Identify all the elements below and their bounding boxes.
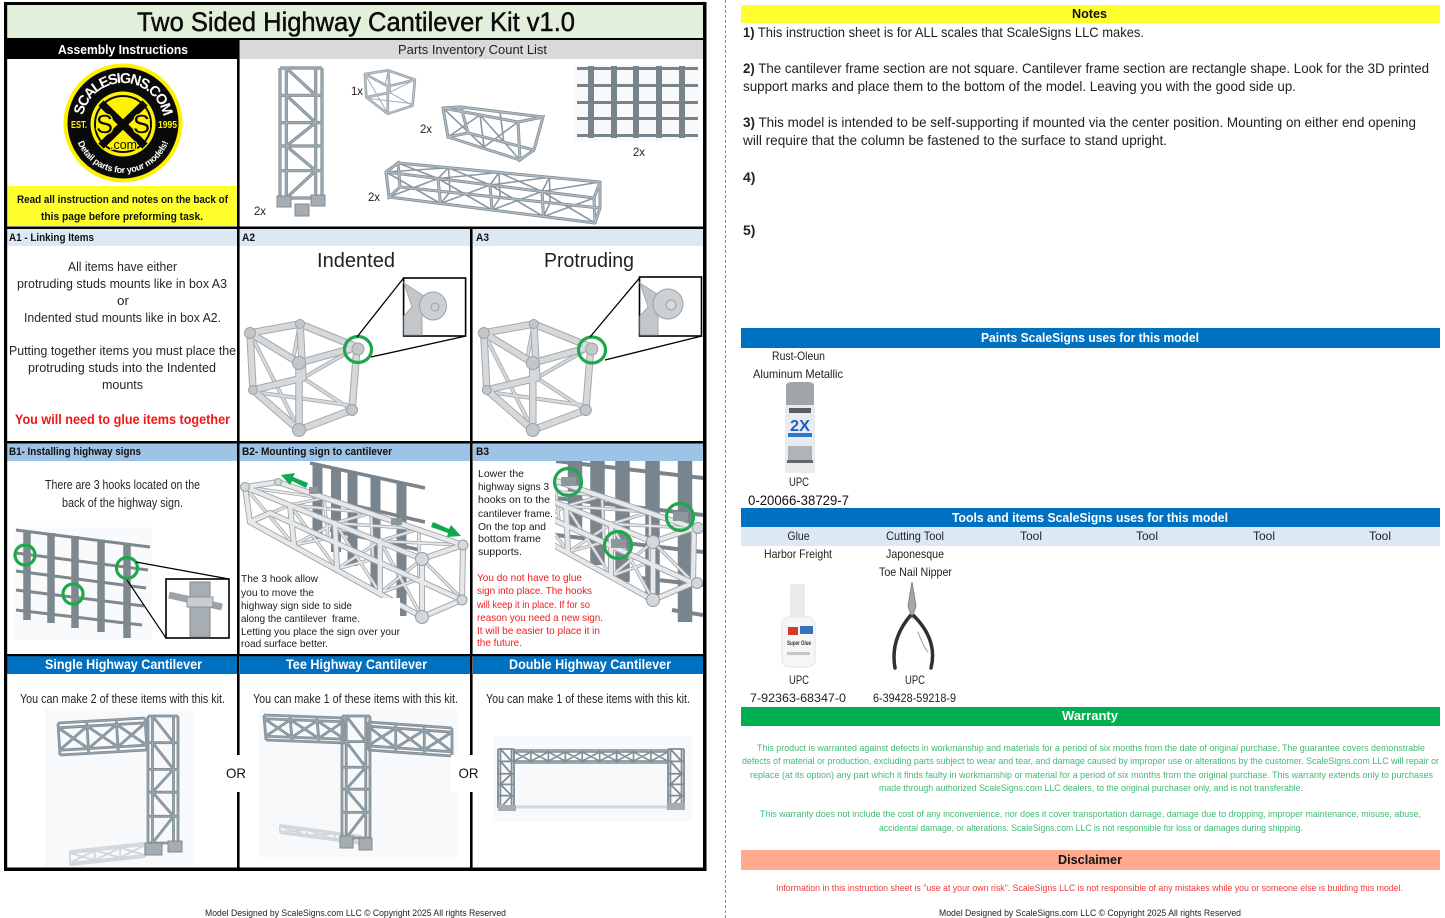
paint name: Aluminum Metallic bbox=[753, 367, 843, 381]
right page: notes and materials bbox=[741, 5, 1440, 918]
warranty header: Warranty bbox=[1062, 708, 1119, 723]
B3 red note: will keep it in place. If for so bbox=[476, 599, 590, 611]
A1 header: A1 - Linking Items bbox=[9, 232, 94, 244]
B3 text: Lower the bbox=[478, 468, 524, 480]
header: assembly instructions: Assembly Instructions bbox=[58, 42, 188, 57]
panel: single highway cantilever bbox=[7, 656, 237, 867]
panel B1: installing highway signs bbox=[7, 443, 237, 640]
B2 text: The 3 hook allow bbox=[241, 573, 318, 585]
panel A1: linking items bbox=[7, 229, 237, 427]
B3 red note: It will be easier to place it in bbox=[477, 625, 600, 637]
B2 truss with sign bbox=[240, 463, 468, 624]
A1 text: protruding studs mounts like in box A3 bbox=[17, 277, 227, 291]
tools column headers bbox=[741, 527, 1440, 546]
cutting tool brand bbox=[879, 547, 952, 579]
notice: read all instructions: this page before preforming task. bbox=[41, 211, 203, 223]
left page: assembly sheet bbox=[7, 5, 703, 866]
A1 text bbox=[9, 260, 236, 392]
A1 text: Putting together items you must place the bbox=[9, 344, 236, 358]
tools header: Tools and items ScaleSigns uses for this model bbox=[952, 510, 1228, 525]
OR label between single and tee bbox=[226, 755, 250, 792]
A1 text: All items have either bbox=[68, 260, 177, 274]
center fold line bbox=[724, 0, 726, 918]
paint name bbox=[753, 349, 843, 381]
B2 move arrows bbox=[281, 473, 461, 537]
A1 text: or bbox=[117, 294, 129, 308]
B3 text bbox=[478, 468, 553, 558]
tee cantilever illustration bbox=[259, 707, 457, 857]
icon: nail nipper bbox=[894, 582, 933, 668]
warranty text bbox=[742, 743, 1439, 834]
B3 red note bbox=[476, 572, 603, 649]
B2 text: Letting you place the sign over your bbox=[241, 626, 400, 638]
B3 text: On the top and bbox=[478, 521, 546, 533]
parts: long truss 2x: 2x bbox=[368, 190, 380, 204]
logo: ScaleSigns badge: EST. bbox=[71, 120, 87, 131]
parts: long truss 2x bbox=[368, 163, 600, 223]
A2 header: A2 bbox=[242, 232, 255, 244]
parts: column x2 bbox=[254, 68, 325, 218]
B1 header bbox=[7, 443, 237, 461]
tool UPCs: UPC bbox=[905, 673, 925, 687]
parts: short truss 2x: 2x bbox=[420, 122, 432, 136]
B1 hook callouts bbox=[15, 545, 229, 638]
B3 text: bottom frame bbox=[478, 533, 541, 545]
tools column headers: Cutting Tool bbox=[886, 529, 944, 543]
B3 red note: the future. bbox=[477, 637, 522, 649]
double caption: You can make 1 of these items with this kit. bbox=[486, 692, 690, 706]
A3 cube bbox=[478, 320, 598, 436]
parts: column x2: 2x bbox=[254, 204, 266, 218]
B3 header bbox=[473, 443, 703, 461]
title band bbox=[7, 5, 703, 38]
single header: Single Highway Cantilever bbox=[45, 657, 203, 672]
paints header bbox=[741, 328, 1440, 348]
logo: ScaleSigns badge: 1995 bbox=[158, 120, 177, 131]
tee caption: You can make 1 of these items with this kit. bbox=[253, 692, 458, 706]
note 3: will require that the column be fastened to the surface to stand upright. bbox=[742, 132, 1167, 148]
A2 cube bbox=[244, 320, 364, 436]
B1 header: B1- Installing highway signs bbox=[9, 446, 141, 458]
disclaimer header: Disclaimer bbox=[1058, 852, 1122, 867]
B3 text: hooks on to the bbox=[478, 494, 550, 506]
B1 sign illustration bbox=[15, 527, 152, 640]
paints header: Paints ScaleSigns uses for this model bbox=[981, 330, 1199, 345]
B1 text: back of the highway sign. bbox=[62, 496, 183, 510]
tee header: Tee Highway Cantilever bbox=[286, 657, 428, 672]
A3 header: A3 bbox=[476, 232, 489, 244]
title band: Two Sided Highway Cantilever Kit v1.0 bbox=[137, 7, 575, 37]
logo: ScaleSigns badge: S bbox=[96, 109, 113, 139]
B3 illustration bbox=[555, 461, 703, 622]
A2 callout circle and zoom box bbox=[344, 278, 466, 362]
OR label between tee and double bbox=[451, 755, 480, 792]
tool UPCs: 6-39428-59218-9 bbox=[873, 691, 956, 705]
panel: double highway cantilever bbox=[473, 656, 703, 822]
note 1: 1) This instruction sheet is for ALL scales that ScaleSigns LLC makes. bbox=[743, 24, 1144, 40]
warranty header bbox=[741, 707, 1440, 726]
B3 header: B3 bbox=[476, 446, 489, 458]
parts: linking cube 1x bbox=[351, 70, 415, 114]
logo: ScaleSigns badge: .com bbox=[110, 137, 137, 152]
icon: spray can: 2X bbox=[790, 418, 810, 435]
parts: highway sign grid 2x bbox=[574, 65, 699, 159]
icon: spray can bbox=[785, 382, 815, 473]
logo: ScaleSigns badge: S bbox=[133, 109, 150, 139]
A3 callout circle and zoom box bbox=[578, 277, 702, 363]
note 2: 2) The cantilever frame section are not square. Cantilever frame section are rectangle shape. Look for the 3D printed bbox=[743, 60, 1429, 76]
A1 text: protruding studs into the Indented bbox=[28, 361, 216, 375]
header: parts inventory: Parts Inventory Count List bbox=[398, 42, 547, 57]
note 5: 5) bbox=[743, 222, 755, 238]
header: assembly instructions bbox=[7, 40, 237, 59]
tool UPCs bbox=[750, 673, 956, 705]
parts: short truss 2x bbox=[420, 107, 543, 160]
A2 header bbox=[240, 229, 470, 246]
disclaimer header bbox=[741, 850, 1440, 870]
header: parts inventory bbox=[240, 40, 703, 59]
parts: linking cube 1x: 1x bbox=[351, 84, 363, 98]
disclaimer text: Information in this instruction sheet is "use at your own risk". ScaleSigns LLC is not responsible of any mistakes while you or someone else is building this model. bbox=[776, 883, 1403, 894]
A1 text: mounts bbox=[102, 378, 143, 392]
B3 text: supports. bbox=[478, 546, 522, 558]
B2 header bbox=[240, 443, 470, 461]
A1 text: Indented stud mounts like in box A2. bbox=[24, 311, 221, 325]
B2 header: B2- Mounting sign to cantilever bbox=[242, 446, 393, 458]
tool UPCs: 7-92363-68347-0 bbox=[750, 691, 846, 705]
panel: tee highway cantilever bbox=[240, 656, 470, 857]
tools column headers: Tool bbox=[1253, 529, 1275, 543]
icon: glue bottle: Super Glue bbox=[787, 640, 811, 647]
B2 text: you to move the bbox=[241, 587, 314, 599]
A1 glue warning: You will need to glue items together bbox=[15, 411, 230, 427]
panel B3 bbox=[473, 443, 704, 649]
B3 red note: reason you need a new sign. bbox=[477, 612, 603, 624]
warranty text: accidental damage, or alterations. ScaleSigns.com LLC is not responsible for loss or damages during shipping. bbox=[879, 823, 1303, 834]
B2 text: along the cantilever frame. bbox=[241, 613, 360, 625]
notes header bbox=[741, 5, 1440, 23]
icon: glue bottle bbox=[782, 584, 815, 667]
notes header: Notes bbox=[1072, 7, 1107, 21]
B3 text: highway signs 3 bbox=[478, 481, 549, 493]
note 3 bbox=[742, 114, 1416, 148]
paint name: Rust-Oleun bbox=[772, 349, 825, 363]
paint UPC: 0-20066-38729-7 bbox=[748, 493, 849, 508]
tools header bbox=[741, 508, 1440, 527]
table frame lines bbox=[4, 2, 706, 871]
tools column headers: Tool bbox=[1136, 529, 1158, 543]
glue brand: Harbor Freight bbox=[764, 547, 833, 561]
B3 red note: You do not have to glue bbox=[477, 572, 582, 584]
paint UPC bbox=[748, 475, 849, 508]
cutting tool brand: Japonesque bbox=[886, 547, 944, 561]
tool UPCs: UPC bbox=[789, 673, 809, 687]
single cantilever illustration bbox=[45, 709, 193, 867]
logo: ScaleSigns badge bbox=[64, 64, 182, 182]
note 4: 4) bbox=[743, 169, 755, 185]
logo: ScaleSigns badge: Detail parts for your models! bbox=[78, 140, 168, 175]
B1 text: There are 3 hooks located on the bbox=[45, 478, 200, 492]
B3 hook callouts bbox=[554, 468, 694, 558]
panel A3: protruding bbox=[473, 229, 703, 436]
A3 header bbox=[473, 229, 703, 246]
double header: Double Highway Cantilever bbox=[509, 657, 672, 672]
A1 header bbox=[7, 229, 237, 246]
OR label between single and tee: OR bbox=[226, 765, 246, 781]
panel B2: mounting sign bbox=[240, 443, 470, 653]
B3 red note: sign into place. The hooks bbox=[477, 585, 592, 597]
A2 heading: Indented bbox=[317, 250, 395, 272]
B2 text: road surface better. bbox=[241, 638, 328, 650]
note 2 bbox=[743, 60, 1429, 94]
cutting tool brand: Toe Nail Nipper bbox=[879, 565, 952, 579]
single caption: You can make 2 of these items with this kit. bbox=[20, 692, 225, 706]
panel A2: indented bbox=[240, 229, 470, 436]
notice: read all instructions bbox=[7, 186, 237, 226]
single header bbox=[7, 656, 237, 674]
double cantilever illustration bbox=[493, 736, 692, 822]
paint UPC: UPC bbox=[789, 475, 809, 489]
tools column headers: Glue bbox=[788, 529, 810, 543]
B2 text: highway sign side to side bbox=[241, 600, 352, 612]
A3 heading: Protruding bbox=[544, 250, 634, 272]
double header bbox=[473, 656, 703, 674]
OR label between tee and double: OR bbox=[458, 765, 478, 781]
B2 text bbox=[240, 572, 400, 653]
B1 text bbox=[45, 478, 200, 510]
notice: read all instructions: Read all instruction and notes on the back of bbox=[17, 194, 228, 206]
B3 text: cantilever frame. bbox=[478, 508, 553, 520]
tools column headers: Tool bbox=[1369, 529, 1391, 543]
parts: highway sign grid 2x: 2x bbox=[633, 145, 645, 159]
note 2: support marks and place them to the bottom of the model. Leaving you with the good side up. bbox=[743, 78, 1296, 94]
note 3: 3) This model is intended to be self-supporting if mounted via the center position. Mounting on either end opening bbox=[743, 114, 1416, 130]
logo: ScaleSigns badge: SCALESIGNS.COM bbox=[74, 73, 173, 116]
tee header bbox=[240, 656, 470, 674]
tools column headers: Tool bbox=[1020, 529, 1042, 543]
warranty text: made through authorized ScaleSigns.com LLC dealers, to the original purchaser only, and is not transferable. bbox=[879, 783, 1303, 794]
